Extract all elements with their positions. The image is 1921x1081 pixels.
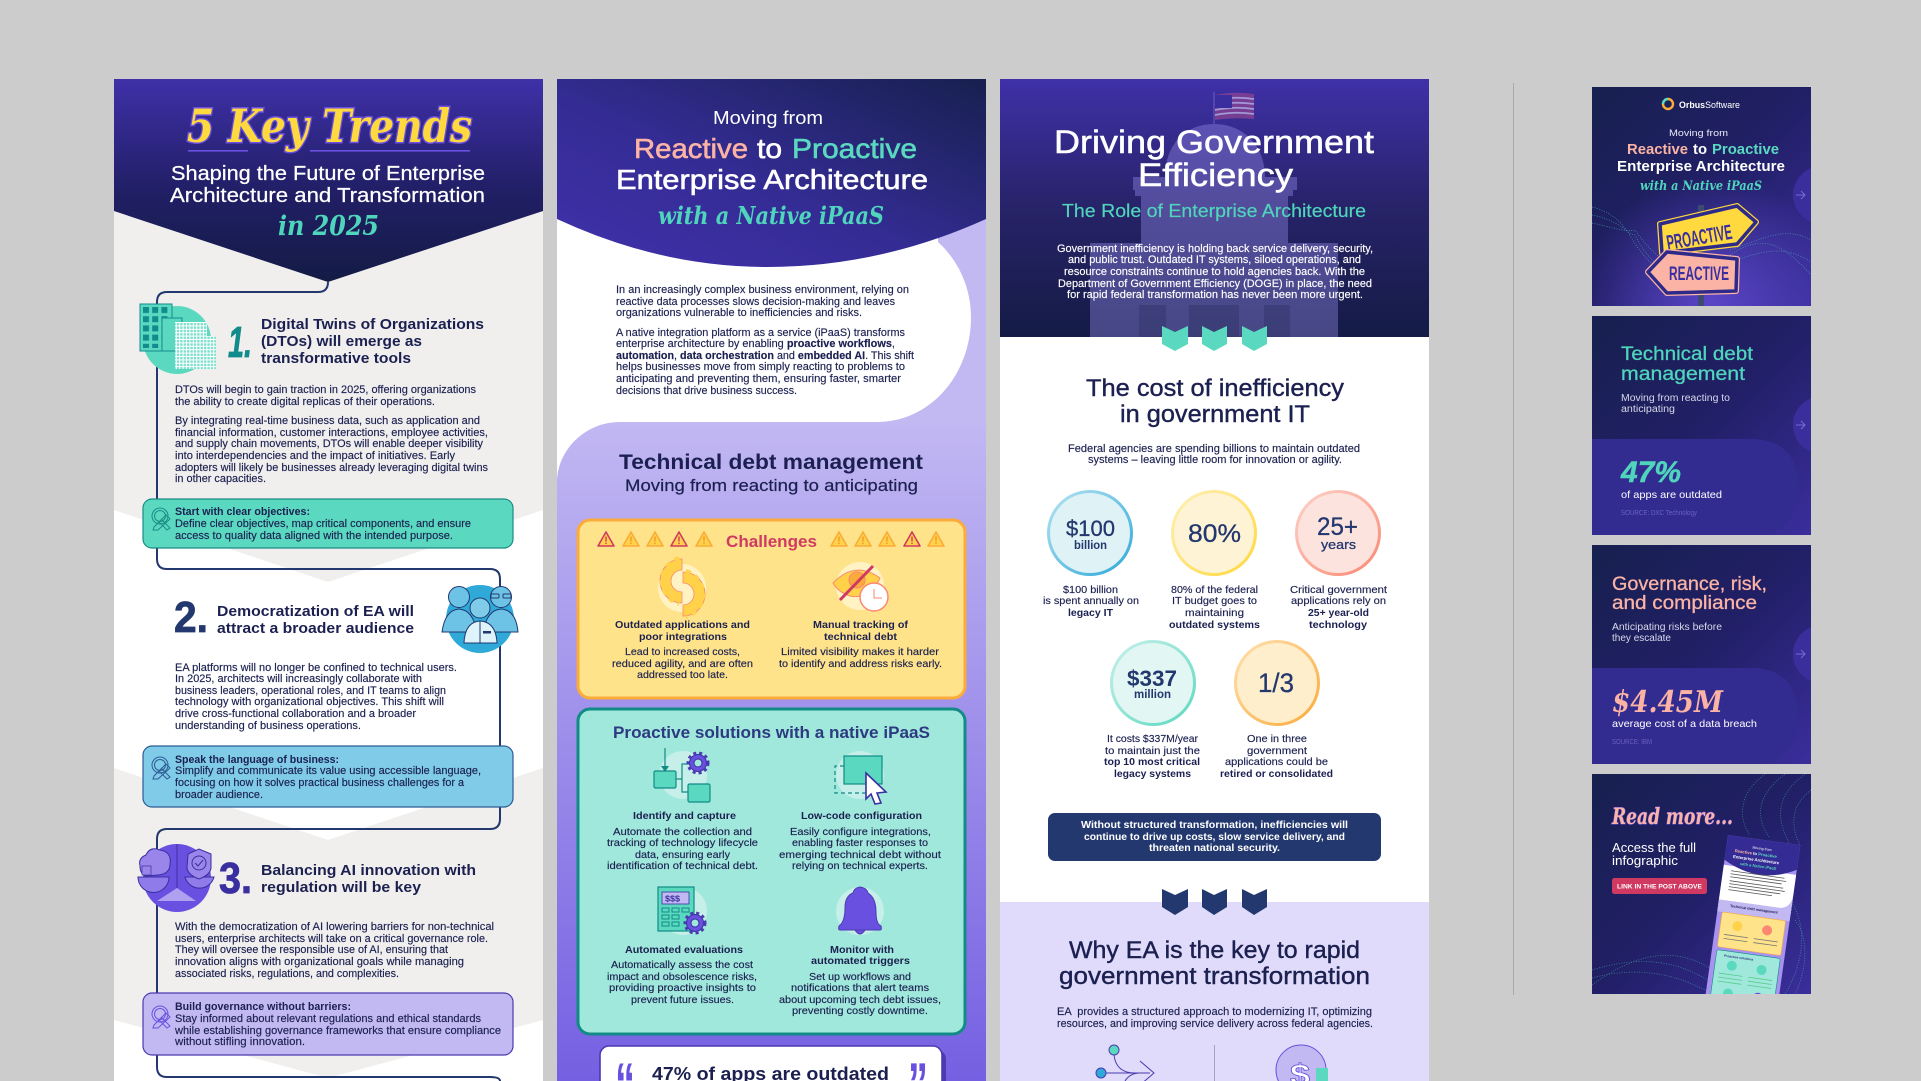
challenge 2 text [779,620,942,670]
thumbnail 2: technical debt [1592,316,1811,535]
thumbnail stat [1620,456,1722,517]
thumbnail 3: governance [1592,545,1811,764]
thumbnail heading: they escalate [1612,633,1671,644]
thumbnail heading: and compliance [1612,593,1757,614]
stat: $337 million [1104,642,1200,780]
thumbnail heading: Read more... [1611,804,1733,830]
icon: eye with clock [833,562,888,611]
button [1612,878,1707,894]
stat: 1/3: retired or consolidated [1220,769,1333,780]
cost intro [1068,443,1360,466]
arrows: teal chevrons [1162,326,1267,351]
trend 3 body: associated risks, regulations, and complexities. [175,968,399,980]
stat: 1/3: One in three [1247,734,1307,745]
stat: 80%: 80% [1188,520,1241,548]
trend 2 body [175,662,457,732]
trend 2 body: understanding of business operations. [175,720,361,732]
thumbnail heading [1621,344,1754,415]
subtitle: The Role of Enterprise Architecture [1062,200,1366,221]
logo: OrbusSoftware [1679,100,1740,110]
intro text [1057,243,1373,301]
solution 3 text: prevent future issues. [631,995,734,1006]
trend 2 body: In 2025, architects will increasingly collaborate with [175,673,422,685]
solution 2 text: relying on technical experts. [792,861,928,872]
solution 4 text: Set up workflows and [809,972,911,983]
stat: $337 million: It costs $337M/year [1107,734,1199,745]
stat: $337 million: legacy systems [1114,769,1191,780]
thumbnail heading: anticipating [1621,404,1675,415]
trend 3 heading: Balancing AI innovation with [261,862,476,879]
thumbnail heading: Governance, risk, [1612,574,1767,595]
solution 4 text: preventing costly downtime. [792,1006,928,1017]
solution 4 text [779,945,941,1017]
cost intro: systems – leaving little room for innovation or agility. [1088,454,1342,466]
stat: $100 billion [1043,492,1139,619]
section heading: technical debt [619,450,923,495]
heading: cost of inefficiency: The cost of inefficiency [1086,375,1344,402]
solution 1 text: identification of technical debt. [607,861,758,872]
trend 1 body: adopters will likely be businesses already leveraging digital twins [175,462,488,474]
solution 3 text: Automated evaluations [625,945,743,956]
trend 2 body: EA platforms will no longer be confined to technical users. [175,662,457,674]
heading: cost of inefficiency [1086,375,1344,428]
trend 2 body: technology with organizational objectives. This shift will [175,696,444,708]
stat: 25+ years: technology [1309,620,1367,631]
intro text: decisions that drive business success. [616,385,797,397]
dotted waves [1592,207,1811,278]
solution 1 text [607,811,758,872]
trend 1 body: into interdependencies and the impact of initiatives. Early [175,450,456,462]
stat: 80% [1169,492,1260,631]
callout: speak the language of business: broader audience. [175,789,263,801]
challenge 1 text: Lead to increased costs, [625,647,740,658]
intro text: A native integration platform as a service (iPaaS) transforms [616,327,905,339]
signpost [1648,205,1756,306]
signpost: REACTIVE [1669,264,1729,285]
solutions heading: Proactive solutions with a native iPaaS [613,724,930,742]
thumbnail heading [1612,574,1767,644]
section heading: technical debt: Moving from reacting to anticipating [625,476,918,495]
header banner [114,79,543,282]
thumbnail stat [1612,689,1756,744]
panel: proactive solutions [578,709,965,1034]
solution 2 text: enabling faster responses to [792,838,928,849]
thumbnail stat: 47% [1620,456,1681,489]
heading: Enterprise Architecture [616,164,928,195]
stat: 25+ years: 25+ year-old [1308,608,1369,619]
solution 3 text: impact and obsolescence risks, [607,972,757,983]
solution 2 text: Low-code configuration [801,811,922,822]
trend 1 body: DTOs will begin to gain traction in 2025, offering organizations [175,384,476,396]
icon: people [442,585,518,653]
intro text: anticipating and preventing them, ensuring faster, smarter [616,373,901,385]
stat: 1/3: government [1247,746,1307,757]
thumbnail heading: Enterprise Architecture [1617,159,1785,175]
intro text: resource constraints continue to hold agencies back. With the [1064,266,1365,278]
callout: start with clear objectives: Define clear objectives, map critical components, and ensure [175,518,471,530]
heading: why EA: government transformation [1059,963,1370,990]
title [1054,124,1374,193]
trend 3 heading [261,862,476,896]
thumbnail text: infographic [1612,853,1679,868]
stat: $337 million: top 10 most critical [1104,757,1200,768]
white wave [557,210,971,483]
callout: without structured transformation: continue to drive up costs, slow service delivery, and [1084,832,1345,843]
thumbnail stat: SOURCE: DXC Technology [1621,510,1697,517]
solution 1 text: data, ensuring early [635,850,731,861]
callout: build governance without barriers [143,993,513,1055]
trend 1 body: financial information, customer interactions, employee activities, [175,427,488,439]
solution 2 text: Easily configure integrations, [790,827,931,838]
header banner [557,79,986,267]
thumbnail heading: Proactive [1712,142,1779,158]
intro text: and public trust. Outdated IT systems, siloed operations, and [1068,254,1361,266]
stat: 80%: outdated systems [1169,620,1260,631]
why EA intro [1057,1006,1373,1030]
challenges heading: Challenges [726,533,817,551]
stat: 25+ years: Critical government [1290,585,1387,596]
trend 3 number: 3. [219,854,252,903]
thumbnail heading: Reactive [1627,142,1688,158]
stat: $337 million: $337 [1127,666,1177,691]
icon: flow with gear [654,748,710,802]
solution 4 text: notifications that alert teams [791,983,929,994]
panel: driving government efficiency [1000,79,1429,1081]
solution 3 text: providing proactive insights to [609,983,756,994]
stat: 80%: IT budget goes to [1172,596,1257,607]
icon: cursor on window [835,751,886,804]
trend 1 heading: (DTOs) will emerge as [261,333,422,350]
trend 1 number: 1. [228,318,252,367]
subtitle: in 2025 [278,211,379,242]
mini infographic: Enterprise Architecture [1733,854,1780,865]
callout: speak the language of business: focusing on how it solves practical business challenges for a [175,777,464,789]
thumbnail 4: read more [1592,774,1811,994]
intro text: reactive data processes slows decision-making and leaves [616,296,895,308]
challenge 1 text: Outdated applications and [615,620,750,631]
icon: calculator with gear: $$$ [665,894,681,904]
thumbnail heading: Moving from [1669,128,1728,139]
thumbnail text: Access the full [1612,840,1696,855]
trend 2 body: business leaders, operational roles, and IT teams to align [175,685,446,697]
heading: Moving from [713,108,823,128]
trend 3 body: With the democratization of AI lowering barriers for non-technical [175,921,494,933]
heading: cost of inefficiency: in government IT [1120,401,1310,428]
solution 4 text: about upcoming tech debt issues, [779,995,941,1006]
thumbnail stat: SOURCE: IBM [1612,739,1652,746]
solution 2 text: emerging technical debt without [779,850,941,861]
intro text: helps businesses move from simply reacting to problems to [616,361,905,373]
challenge 2 text: Manual tracking of [813,620,909,631]
solution 1 text: tracking of technology lifecycle [607,838,758,849]
solution 4 text: automated triggers [811,956,910,967]
arrow [1796,191,1805,199]
callout: build governance without barriers: Build governance without barriers: [175,1001,351,1013]
why EA intro: resources, and improving service delivery across federal agencies. [1057,1018,1373,1030]
subtitle: Shaping the Future of Enterprise [171,163,485,185]
callout: start with clear objectives: Start with clear objectives: [175,506,310,518]
intro text: organizations vulnerable to inefficiencies and risks. [616,307,862,319]
thumbnail heading: management [1621,364,1746,385]
thumbnail stat: of apps are outdated [1621,489,1722,501]
warning icons [598,532,944,546]
challenge 2 text: technical debt [824,632,898,643]
stat: 80%: maintaining [1185,608,1244,619]
stat: 25+ years: 25+ [1317,513,1358,541]
challenge 1 text: poor integrations [639,632,727,643]
intro text: Government inefficiency is holding back service delivery, security, [1057,243,1373,255]
thumbnail heading: to [1693,142,1707,158]
stat: $337 million: million [1134,687,1171,701]
arrow [1796,421,1805,429]
thumbnail heading: Anticipating risks before [1612,622,1722,633]
intro text: automation, data orchestration and embedded AI. This shift [616,350,914,362]
challenge 1 text [612,620,753,681]
heading: Reactive [634,133,748,164]
challenge 2 text: to identify and address risks early. [779,659,942,670]
stat: 1/3 [1220,642,1333,780]
challenge 2 text: Limited visibility makes it harder [781,647,940,658]
trend 1 heading: Digital Twins of Organizations [261,316,484,333]
header banner [1000,79,1429,337]
stat block [1592,668,1798,764]
cost intro: Federal agencies are spending billions to maintain outdated [1068,443,1360,455]
callout: speak the language of business [143,746,513,807]
mini infographic: with a Native iPaaS [1740,861,1777,871]
section: why EA [1000,889,1429,1081]
intro text: In an increasingly complex business environment, relying on [616,284,909,296]
heading: why EA: Why EA is the key to rapid [1069,937,1360,964]
challenge 1 text: addressed too late. [637,670,728,681]
capitol silhouette [1090,124,1338,337]
thumbnail text [1612,842,1696,868]
trend 2 number: 2. [174,593,208,642]
connector line between trends [157,282,500,1081]
intro text: Department of Government Efficiency (DOGE) in place, the need [1058,278,1372,290]
callout: start with clear objectives: access to quality data aligned with the intended purpose. [175,530,453,542]
solution 1 text: Automate the collection and [613,827,752,838]
heading: Proactive [792,133,917,164]
solution 3 text [607,945,757,1006]
solution 1 text: Identify and capture [633,811,736,822]
trend 1 body: the ability to create digital replicas of their operations. [175,396,435,408]
panel: 5 key trends [114,79,543,1081]
trend 2 body: drive cross-functional collaboration and a broader [175,708,416,720]
callout: speak the language of business: Speak the language of business: [175,754,339,766]
icon: scales [138,844,214,912]
trend 3 body: They will oversee the responsible use of AI, ensuring that [175,944,448,956]
solution 2 text [779,811,941,872]
stat: $100 billion: billion [1074,538,1107,552]
challenge 1 text: reduced agility, and are often [612,659,753,670]
thumbnail heading [1617,128,1785,194]
stat: 80%: 80% of the federal [1171,585,1258,596]
mini infographic: Proactive solutions [1724,954,1754,962]
stat block [1592,439,1798,535]
heading: with a Native iPaaS [658,201,884,230]
stat: 1/3: applications could be [1225,757,1328,768]
thumbnail heading: with a Native iPaaS [1640,179,1762,194]
dotted waves [1592,774,1811,994]
stat: $100 billion: is spent annually on [1043,596,1139,607]
subtitle: Architecture and Transformation [170,185,485,207]
trend 1 body: By integrating real-time business data, such as application and [175,415,480,427]
callout: without structured transformation: threaten national security. [1149,843,1280,854]
trend 2 heading: Democratization of EA will [217,603,414,620]
icon: converging arrows [1096,1045,1154,1081]
callout: start with clear objectives [143,499,513,548]
icon: flag [1214,92,1254,124]
icon: dollar [1276,1045,1328,1081]
stat: 1/3: 1/3 [1258,668,1294,698]
trend 1 heading: transformative tools [261,350,411,367]
heading: why EA [1059,937,1370,990]
thumbnail stat: average cost of a data breach [1612,718,1757,730]
why EA intro: EA provides a structured approach to modernizing IT, optimizing [1057,1006,1372,1018]
trend 3 heading: regulation will be key [261,879,422,896]
quote stat card [600,1046,946,1081]
stat: $100 billion: $100 billion [1063,585,1118,596]
panel: challenges [578,520,965,698]
icon: dollar gears [658,558,706,617]
trend 3 body [175,921,494,980]
icon: buildings [140,304,216,374]
title: 5 Key Trends [187,99,472,153]
divider [1513,83,1514,995]
trend 2 heading: attract a broader audience [217,620,414,637]
stat: 25+ years [1290,492,1387,631]
callout: without structured transformation: Without structured transformation, inefficiencies will [1081,820,1348,831]
thumbnail 1: reactive to proactive [1592,87,1811,306]
thumbnail stat: $4.45M [1612,685,1724,720]
intro text: for rapid federal transformation has never been more urgent. [1067,289,1363,301]
trend 1 heading [261,316,484,367]
button: LINK IN THE POST ABOVE [1617,884,1703,890]
heading [616,108,928,230]
arrows: navy chevrons [1162,889,1267,915]
trend 2 heading [217,603,414,637]
stat: $337 million: to maintain just the [1105,746,1200,757]
thumbnail heading: Moving from reacting to [1621,393,1730,404]
icon: bell [836,887,884,935]
title: Driving Government [1054,124,1374,160]
white section band [114,510,543,840]
callout: build governance without barriers: without stifling innovation. [174,1036,305,1048]
trend 1 body: and supply chain movements, DTOs will enable deeper visibility [175,438,484,450]
mini infographic: Moving from [1752,846,1772,852]
stat: 25+ years: applications rely on [1291,596,1386,607]
stat: $100 billion: legacy IT [1068,608,1114,619]
trend 3 body: users, enterprise architects will take on a critical governance role. [175,933,488,945]
callout: build governance without barriers: Stay informed about relevant regulations and ethical standards [175,1013,481,1025]
signpost: PROACTIVE [1665,221,1734,255]
panel: reactive to proactive [557,79,986,1081]
subtitle [170,163,485,242]
mini infographic [1706,835,1800,994]
callout: speak the language of business: Simplify and communicate its value using accessible language, [175,765,481,777]
callout: build governance without barriers: while establishing governance frameworks that ensure compliance [174,1025,501,1037]
trend 1 body: in other capacities. [175,473,266,485]
solution 3 text: Automatically assess the cost [611,960,753,971]
mini infographic: Reactive to Proactive [1735,848,1778,859]
heading: to [757,133,782,164]
stat: $100 billion: $100 [1066,516,1115,541]
intro text [616,284,914,397]
intro text: enterprise architecture by enabling proactive workflows , [616,338,895,350]
callout: without structured transformation [1048,813,1381,861]
trend 3 body: innovation aligns with organizational goals while managing [175,956,464,968]
section heading: technical debt: Technical debt management [619,450,923,474]
stat: 25+ years: years [1321,537,1357,552]
arrow [1796,650,1805,658]
trend 1 body [175,384,488,485]
mini infographic: Technical debt management [1730,904,1779,915]
title: Efficiency [1138,157,1293,193]
icon: calculator with gear [658,887,707,935]
solution 4 text: Monitor with [830,945,894,956]
thumbnail heading: Technical debt [1621,344,1754,365]
